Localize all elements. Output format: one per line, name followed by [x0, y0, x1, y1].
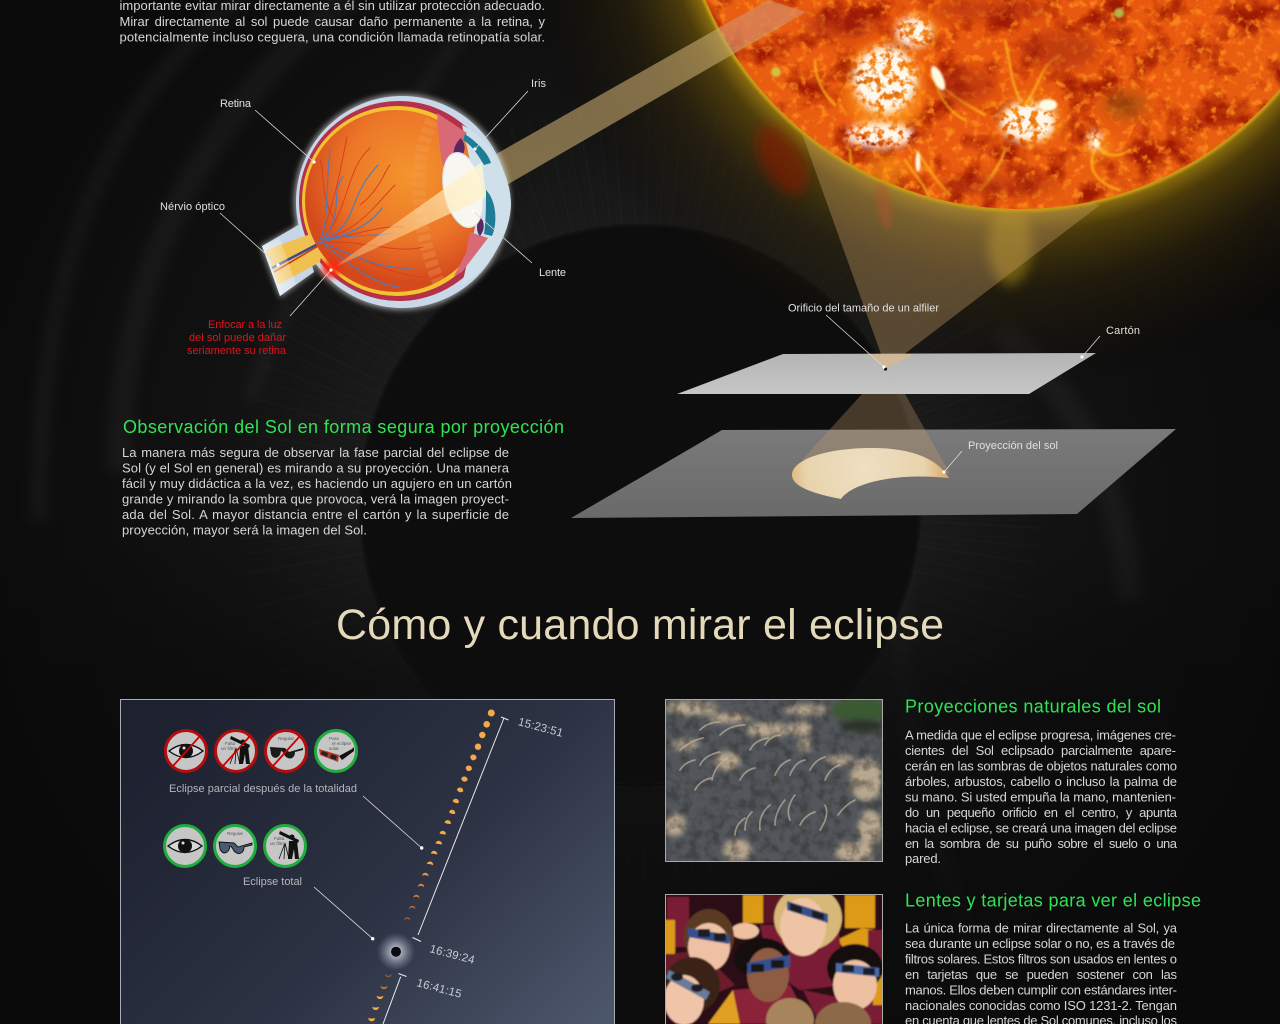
icon: eclipse glasses allowed: Para	[329, 736, 339, 741]
photo: natural eclipse projections	[664, 698, 888, 862]
projection body text: ada del Sol. A mayor distancia entre el cartón y la superficie de	[122, 507, 509, 522]
eye interior	[305, 110, 487, 292]
text: glasses and cards: manos. Ellos deben cumplir con estándares inter-	[905, 982, 1177, 998]
icon: regular sunglasses prohibited: Regular	[278, 736, 295, 741]
student 1	[731, 886, 842, 956]
projection body text	[122, 445, 512, 538]
leader lines	[314, 796, 423, 940]
labels of the eye: Lente	[539, 267, 566, 279]
intro text block	[120, 0, 546, 44]
projection body text: grande y mirando la sombra que provoca, verá la imagen proyect-	[122, 492, 509, 506]
heading: natural projections: Proyecciones naturales del sol	[905, 696, 1161, 716]
iris teal	[463, 134, 491, 165]
icon: naked eye allowed	[164, 826, 206, 866]
icon: telescope allowed: un filtro	[270, 841, 286, 846]
time axis lines	[383, 717, 508, 1024]
sun	[676, 0, 1280, 212]
labels of the eye: Enfocar a la luz	[208, 319, 282, 331]
student 4	[827, 944, 883, 1010]
section title: Cómo y cuando mirar el eclipse	[336, 601, 944, 649]
focused sunlight in eye	[331, 162, 486, 269]
hot halos of the active regions	[847, 14, 1114, 186]
labels of the eye: Iris	[531, 78, 546, 90]
light cone from sun to pinhole	[800, 128, 1100, 368]
lens	[437, 149, 489, 231]
panel: eclipse timeline	[120, 700, 614, 1024]
light beam from sun to eye	[482, 0, 806, 197]
projection body text: La manera más segura de observar la fase parcial del eclipse de	[122, 445, 509, 460]
labels of the projection	[788, 302, 1140, 474]
labels of the eye: del sol puede dañar	[189, 332, 286, 344]
text: glasses and cards: filtros solares. Estos filtros son usados en lentes o	[905, 952, 1177, 966]
icon: regular sunglasses prohibited	[266, 730, 306, 772]
front of the eye	[437, 113, 511, 285]
student 3	[734, 938, 790, 1002]
sun path after totality	[368, 974, 392, 1021]
icons: total eclipse	[164, 826, 306, 866]
sclera	[296, 96, 508, 308]
students' hair at bottom	[766, 998, 871, 1024]
photo: students with eclipse glasses	[664, 886, 883, 1024]
icon: eclipse glasses allowed	[316, 730, 356, 772]
cardboard	[677, 353, 1096, 394]
optic nerve sheath	[262, 224, 314, 296]
projection body text: Sol (y el Sol en general) es mirando a su proyección. Una manera	[122, 460, 510, 476]
icons: partial eclipse	[166, 730, 356, 772]
clear cornea	[462, 125, 511, 285]
labels of the projection: Orificio del tamaño de un alfiler	[788, 302, 939, 314]
intro text block: Mirar directamente al sol puede causar daño permanente a la retina, y	[120, 14, 546, 29]
icon: telescope without filter prohibited: Falta	[225, 741, 236, 746]
labels of the projection: Proyección del sol	[968, 440, 1058, 452]
pink ciliary tissue bottom	[454, 232, 488, 276]
labels of the projection: Cartón	[1106, 325, 1140, 337]
icon: telescope without filter prohibited: un filtro	[221, 746, 237, 751]
time labels: 16:41:15	[415, 977, 463, 1001]
text: glasses and cards: nacionales conocidas como ISO 1231-2. Tengan	[905, 998, 1177, 1013]
caption: partial eclipse: Eclipse parcial después de la totalidad	[169, 783, 357, 795]
projection heading: Observación del Sol en forma segura por proyección	[123, 417, 564, 437]
student 2	[684, 909, 734, 971]
projection body text: fácil y muy didáctica a la vez, es haciendo un agujero en un cartón	[122, 476, 512, 491]
sun path before totality	[404, 710, 495, 921]
optic nerve	[266, 205, 325, 285]
eye glow	[294, 94, 510, 310]
projection body text: proyección, mayor será la imagen del Sol.	[122, 522, 367, 538]
text: natural projections: pared.	[905, 851, 941, 866]
labels of the eye: seriamente su retina	[187, 345, 287, 357]
labels of the eye: Retina	[220, 98, 252, 110]
active regions	[846, 17, 1102, 149]
burn spot on retina	[322, 260, 340, 278]
heading: glasses and cards: Lentes y tarjetas para ver el eclipse	[905, 890, 1201, 910]
eye diagram	[260, 94, 511, 310]
text: natural projections: en la sombra de su puño sobre el suelo o una	[905, 836, 1178, 851]
student 5	[664, 957, 720, 1024]
time labels: 15:23:51	[517, 716, 564, 740]
text: natural projections: árboles, arbustos, cabello o incluso la palma de	[905, 774, 1177, 789]
icon: eclipse glasses allowed: el eclipse	[332, 741, 352, 746]
retina yellow	[302, 106, 492, 296]
iris back	[454, 138, 465, 160]
text: natural projections	[905, 728, 1178, 866]
time labels	[415, 716, 564, 1001]
icon: telescope allowed: Falta	[274, 836, 285, 841]
sun loops	[815, 40, 1130, 210]
icon: telescope allowed	[264, 826, 306, 866]
text: natural projections: cientes del Sol eclipsado parcialmente apare-	[905, 743, 1176, 758]
labels of the eye: Nérvio óptico	[160, 201, 225, 213]
total eclipse sun	[378, 934, 414, 970]
text: natural projections: A medida que el eclipse progresa, imágenes cre-	[905, 728, 1176, 742]
light through the top of the cardboard	[868, 354, 915, 368]
text: glasses and cards	[905, 920, 1178, 1024]
icon: eclipse glasses allowed: solar	[329, 746, 339, 751]
text: natural projections: su mano. Si usted empuña la mano, mantenien-	[905, 790, 1176, 804]
text: glasses and cards: en tarjetas que se pueden sostener con las	[905, 967, 1178, 982]
icon: regular sunglasses allowed	[214, 826, 256, 866]
icon: telescope without filter prohibited	[216, 730, 256, 772]
blood vessels	[318, 137, 425, 287]
text: glasses and cards: La única forma de mirar directamente al Sol, ya	[905, 920, 1178, 936]
icon: naked eye prohibited	[166, 730, 206, 772]
projected crescent sun	[792, 448, 949, 499]
text: natural projections: do un pequeño orificio en el centro, y apunta	[905, 805, 1178, 820]
screen plate	[571, 429, 1176, 518]
sun corona glow	[500, 0, 1280, 388]
text: natural projections: cerán en las sombras de objetos naturales como	[905, 758, 1177, 774]
choroid	[299, 101, 499, 301]
text: glasses and cards: sea durante un eclipse solar o no, es a través de	[905, 936, 1175, 951]
ciliary ribs	[419, 120, 440, 285]
pink ciliary tissue top	[437, 113, 467, 167]
light cone below cardboard	[802, 394, 950, 474]
shirts	[665, 895, 883, 1024]
text: natural projections: hacia el eclipse, se creará una imagen del eclipse	[905, 820, 1177, 836]
projection diagram	[571, 353, 1176, 518]
labels of the eye	[160, 78, 566, 357]
caption: total eclipse: Eclipse total	[243, 876, 302, 888]
time labels: 16:39:24	[428, 943, 476, 967]
intro text block: potencialmente incluso ceguera, una condición llamada retinopatía solar.	[120, 30, 545, 44]
icon: regular sunglasses allowed: Regular	[227, 831, 244, 836]
